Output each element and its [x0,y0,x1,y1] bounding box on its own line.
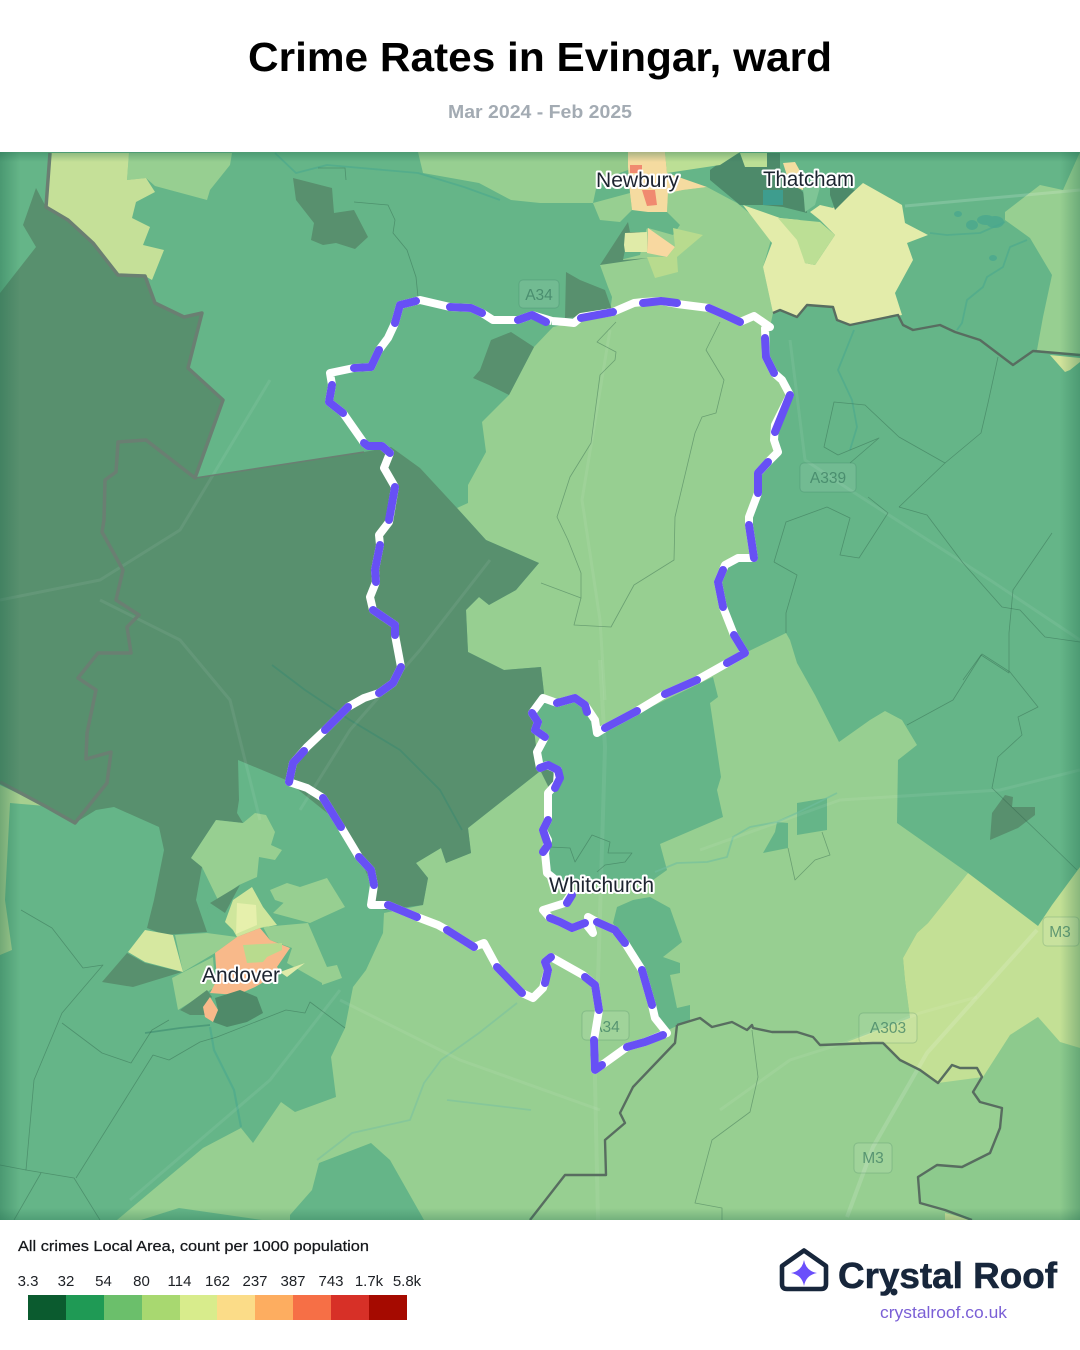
legend scale values: 54 [95,1273,112,1290]
place labels: Thatcham [763,168,854,191]
Thatcham yellow area [743,183,928,325]
legend scale values: 387 [280,1273,306,1290]
place labels: Newbury [596,169,679,192]
logo: Crystal Roof [782,1250,1058,1296]
road number labels: A339 [810,470,846,487]
slightly darker south-east area [918,1017,1080,1220]
medium green block east of Whitchurch [532,677,723,885]
legend scale values [18,1273,422,1290]
logo: Crystal Roof: Crystal Roof [838,1255,1058,1296]
map edge vignette [0,152,1080,1220]
title: Crime Rates in Evingar, ward [248,34,832,80]
main roads [0,190,1080,1220]
legend scale values: 743 [318,1273,344,1290]
Evingar ward boundary [289,300,790,1070]
road number labels: A303 [870,1020,906,1037]
website link: crystalroof.co.uk [880,1304,1008,1322]
legend colour scale [28,1295,407,1320]
subtitle: date range: Mar 2024 - Feb 2025 [448,102,632,122]
legend scale values: 162 [205,1273,230,1290]
medium green patches in the south [141,1208,262,1220]
place labels: Whitchurch [549,874,654,897]
road number labels: M3 [862,1150,884,1167]
legend title: All crimes Local Area, count per 1000 population [18,1238,369,1255]
road number labels [519,280,1079,1173]
legend scale values: 5.8k [393,1273,422,1290]
dark green large area to the west [0,188,544,935]
pale yellow-green areas [46,153,164,280]
road number labels: A34 [525,287,553,304]
small dark patches [293,178,368,249]
place labels [202,168,854,987]
legend scale values: 1.7k [355,1273,384,1290]
road number labels: A34 [592,1019,620,1036]
legend scale values: 32 [58,1273,74,1290]
legend scale values: 3.3 [18,1273,38,1290]
light green areas: central and south [117,187,1080,1220]
road number labels: M3 [1049,924,1071,941]
legend scale values: 114 [168,1273,191,1290]
Thatcham dark and teal wards [710,153,807,213]
light green areas: north [418,152,600,203]
county border [0,153,364,823]
Newbury wards [665,152,740,173]
Andover wards [102,813,345,1027]
legend scale values: 80 [133,1273,150,1290]
legend scale values: 237 [242,1273,268,1290]
choropleth map [0,152,1080,1220]
ward boundaries: thin lines [0,168,1080,1220]
teal lakes [954,211,1004,261]
place labels: Andover [202,964,280,987]
rivers [145,153,1027,1160]
